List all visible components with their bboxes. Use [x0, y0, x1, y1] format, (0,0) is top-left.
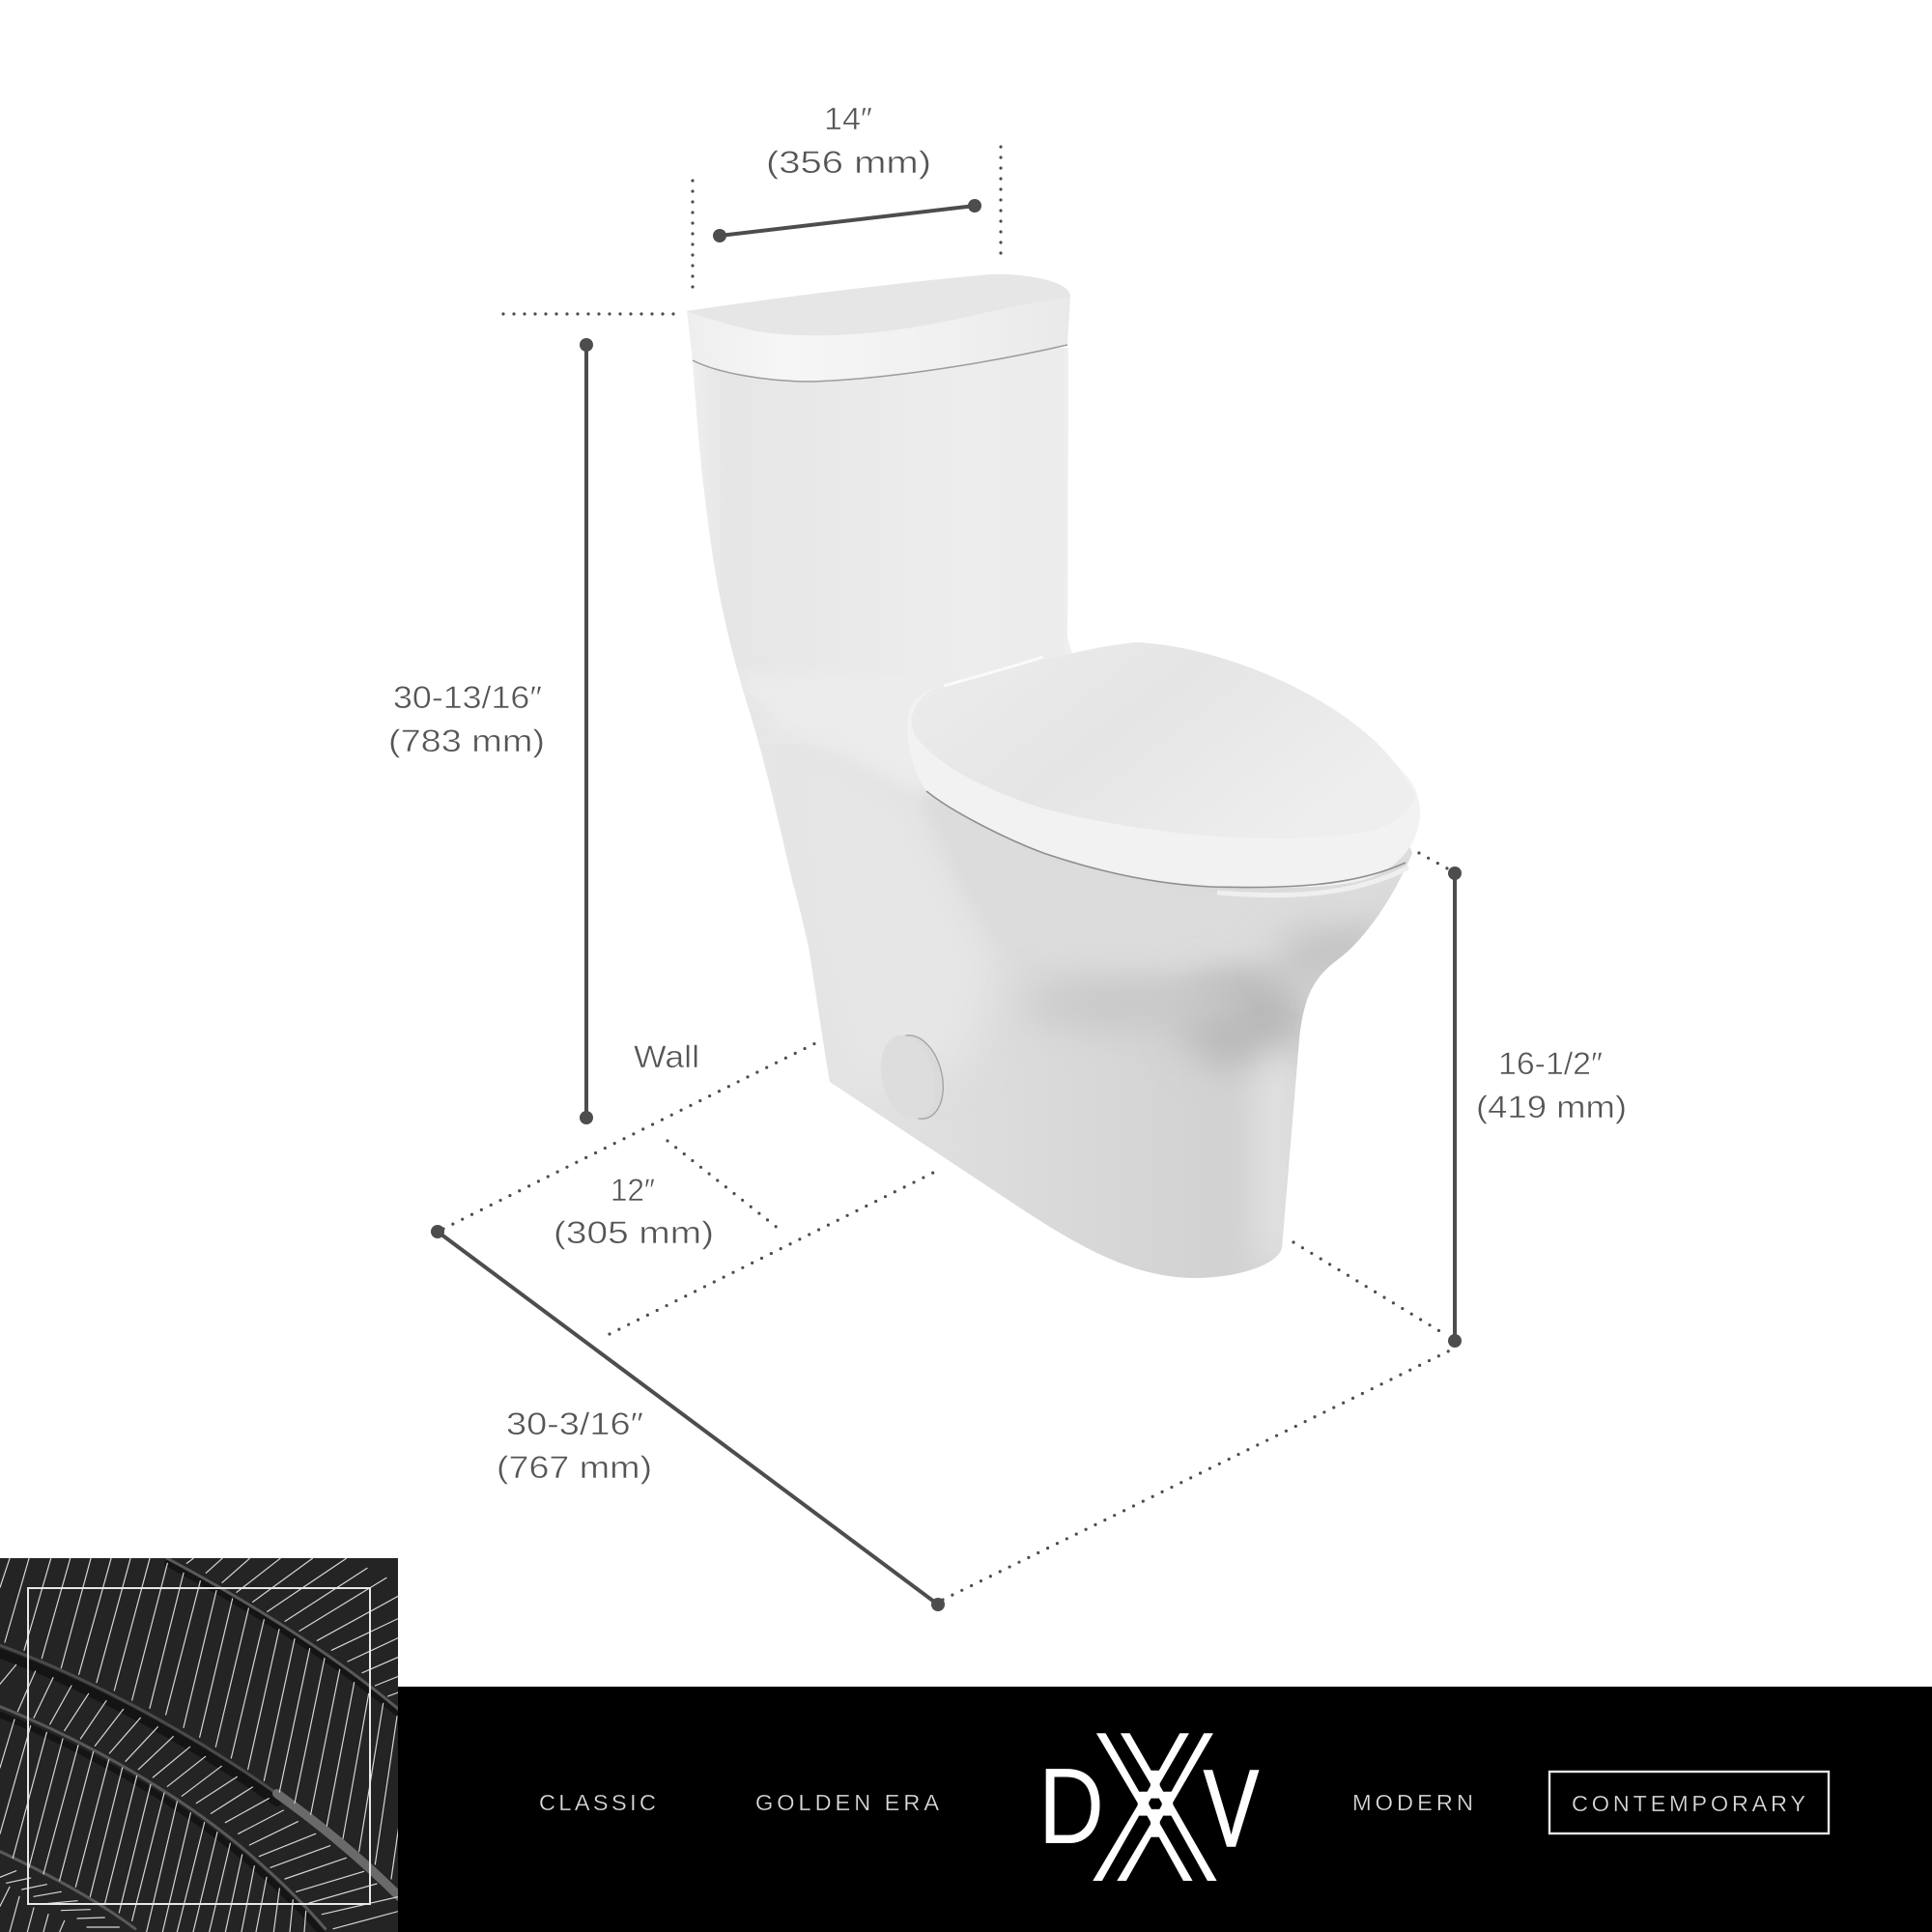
logo double X: X	[1108, 1687, 1226, 1928]
dimension: tank width 14 in	[693, 101, 1001, 290]
toilet illustration	[676, 274, 1449, 1294]
nav: classic: CLASSIC	[539, 1790, 656, 1815]
toilet body: tank and base	[676, 338, 1449, 1294]
measure line	[1448, 867, 1462, 1348]
ribs and fins	[0, 1558, 399, 1932]
nav: contemporary selected box: CONTEMPORARY	[1572, 1791, 1805, 1816]
label: 16-1/2″	[1498, 1046, 1603, 1081]
label: 30-13/16″	[393, 680, 542, 715]
nav: golden era: GOLDEN ERA	[755, 1790, 939, 1815]
right dotted guide	[999, 147, 1003, 256]
label: (356 mm)	[766, 145, 931, 180]
nav: contemporary selected box	[1549, 1772, 1829, 1833]
dimension: height 30-13/16 in	[388, 314, 678, 1124]
drain dotted line	[610, 1172, 935, 1334]
logo letter D: D	[1038, 1747, 1104, 1866]
label: (783 mm)	[388, 724, 545, 758]
bowl rim highlight	[1217, 867, 1408, 895]
left dotted guide	[691, 181, 695, 290]
toilet seat lid	[907, 642, 1420, 888]
label: 12″	[611, 1173, 655, 1208]
dimension: depth 30-3/16 in	[431, 1225, 1452, 1611]
tank lid	[687, 274, 1070, 382]
dimension: wall and rough-in 12 in	[443, 1039, 935, 1334]
fins above top rib	[186, 1558, 399, 1696]
measure line	[713, 199, 981, 242]
upper dotted guide	[1419, 853, 1449, 869]
dimension: seat height 16-1/2 in	[1293, 853, 1627, 1348]
label	[388, 680, 545, 758]
logo letter V: V	[1204, 1747, 1259, 1869]
wall dotted line	[443, 1040, 821, 1229]
measure line	[431, 1225, 945, 1611]
footer black bar	[398, 1687, 1932, 1932]
inner frame	[28, 1588, 370, 1904]
wall label: Wall	[634, 1039, 699, 1074]
lower dotted guide	[1293, 1242, 1446, 1335]
label: (305 mm)	[554, 1215, 714, 1250]
label	[497, 1406, 652, 1485]
label: (419 mm)	[1476, 1090, 1627, 1124]
flush side cap	[872, 1030, 952, 1124]
logo double X: X	[1084, 1687, 1202, 1928]
label: (767 mm)	[497, 1450, 652, 1485]
architectural photo panel	[0, 1558, 399, 1932]
measure line	[580, 338, 593, 1124]
nav: modern: MODERN	[1352, 1790, 1473, 1815]
rough-in dotted connector	[668, 1141, 779, 1229]
label: 14″	[824, 101, 872, 136]
front dotted line	[943, 1350, 1452, 1600]
top dotted guide	[503, 312, 678, 316]
label	[766, 101, 931, 180]
DXV logo	[1038, 1687, 1259, 1928]
label	[1476, 1046, 1627, 1124]
label	[554, 1173, 714, 1250]
label: 30-3/16″	[506, 1406, 643, 1441]
